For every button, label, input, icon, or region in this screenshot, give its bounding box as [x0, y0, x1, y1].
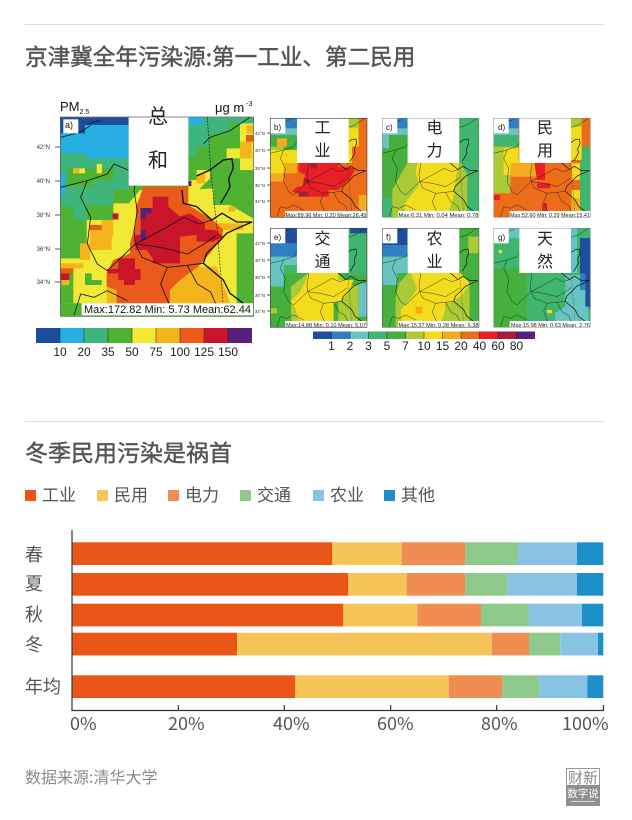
- small map tags and stats: g): [498, 233, 505, 242]
- colour bar: sectors: 80: [510, 339, 523, 353]
- colour bar: sectors: [313, 332, 535, 353]
- map heading: PM2.5: PM: [60, 99, 80, 114]
- axis labels: [70, 710, 609, 736]
- panel: power map: [382, 118, 479, 217]
- small map labels: 用: [537, 137, 553, 161]
- map panel tag: a): [65, 120, 73, 130]
- small map tags and stats: Max:15.98 Min: 0.63 Mean: 2.76: [511, 323, 590, 329]
- small map labels: 力: [426, 137, 443, 161]
- small map tags and stats: Max:6.31 Min: 0.04 Mean: 0.78: [398, 213, 478, 219]
- colour bar: sectors: 5: [384, 339, 391, 353]
- small map latitude labels: 40°N: [255, 258, 265, 263]
- latitude labels: 34°N: [37, 280, 50, 286]
- legend: 其他: [401, 481, 435, 506]
- season labels: 秋: [25, 601, 43, 627]
- title: 京津冀全年污染源:第一工业、第二民用: [25, 39, 415, 72]
- small map tags and stats: e): [274, 233, 281, 242]
- small map tags and stats: Max:15.37 Min: 0.28 Mean: 6.38: [398, 323, 478, 329]
- section heading: 冬季民用污染是祸首: [25, 434, 232, 468]
- small map latitude labels: 38°N: [255, 166, 265, 171]
- legend: 电力: [185, 481, 219, 506]
- panel: industry map: [270, 118, 367, 217]
- colour bar: sectors: 15: [436, 339, 449, 353]
- colour bar: total: 125: [194, 345, 214, 359]
- small map tags and stats: d): [498, 123, 505, 132]
- small map latitude labels: 38°N: [255, 275, 265, 280]
- colour bar: sectors: 1: [328, 339, 335, 353]
- colour bar: total: 20: [77, 345, 91, 359]
- small map tags and stats: b): [274, 123, 281, 132]
- colour bar: total: 75: [149, 345, 163, 359]
- legend: 交通: [257, 481, 291, 506]
- legend: 民用: [114, 481, 148, 506]
- map unit: -3: [244, 101, 252, 108]
- small map latitude labels: 42°N: [255, 131, 265, 136]
- colour bar: sectors: 10: [417, 339, 431, 353]
- map: total: [60, 110, 254, 316]
- small map labels: 通: [314, 248, 331, 272]
- colour bar: sectors: 20: [454, 339, 468, 353]
- label: total: 总: [148, 100, 168, 129]
- colour bar: sectors: 2: [347, 339, 354, 353]
- legend: 农业: [330, 481, 364, 506]
- bar: annual: [72, 675, 603, 698]
- season labels: 夏: [25, 570, 43, 596]
- small map tags and stats: f): [386, 233, 391, 242]
- season labels: [25, 541, 61, 699]
- latitude labels: 42°N: [37, 145, 50, 151]
- colour bar: sectors: 60: [491, 339, 505, 353]
- label: total: 和: [148, 144, 168, 173]
- small map labels: 工: [314, 114, 331, 138]
- small map labels: 然: [537, 248, 553, 272]
- colour bar: total: 35: [101, 345, 115, 359]
- bar: spring: [72, 542, 603, 565]
- season labels: 年均: [25, 673, 61, 699]
- axis labels: 40%: [273, 710, 310, 736]
- chart axes: [72, 530, 604, 710]
- bar: autumn: [72, 604, 603, 626]
- axis labels: 80%: [481, 710, 518, 736]
- small map tags and stats: [274, 123, 590, 329]
- middle divider: [25, 421, 604, 422]
- small map labels: 交: [314, 225, 331, 249]
- latitude labels: 38°N: [37, 213, 50, 219]
- stacked bar chart: [25, 530, 609, 736]
- logo: 财新: [568, 767, 598, 788]
- panel: transport map: [270, 228, 367, 327]
- axis labels: 60%: [377, 710, 414, 736]
- top divider: [25, 24, 604, 25]
- map unit: μg m: [215, 100, 244, 115]
- bar: winter: [72, 633, 603, 655]
- colour bar: total: [36, 328, 252, 359]
- small map latitude labels: 34°N: [255, 199, 265, 204]
- colour bar: total: 100: [170, 345, 190, 359]
- latitude labels: 40°N: [37, 179, 50, 185]
- season labels: 冬: [25, 631, 43, 657]
- colour bar: sectors: 7: [402, 339, 409, 353]
- small map latitude labels: 34°N: [255, 309, 265, 314]
- map heading: PM2.5: 2.5: [80, 109, 89, 116]
- small map latitude labels: 42°N: [255, 241, 265, 246]
- panel: total PM2.5 map: [36, 99, 254, 359]
- small map labels: 电: [426, 114, 443, 138]
- axis labels: 20%: [168, 710, 205, 736]
- small map tags and stats: Max:52.60 Min: 0.29 Mean:15.41: [510, 213, 590, 219]
- season labels: 春: [25, 541, 43, 567]
- logo: 数字说: [567, 786, 599, 801]
- colour bar: sectors: 40: [473, 339, 486, 353]
- small map latitude labels: 36°N: [255, 293, 265, 298]
- small map latitude labels: 36°N: [255, 183, 265, 188]
- small map latitude labels: 40°N: [255, 148, 265, 153]
- panel: agriculture map: [382, 228, 479, 327]
- small map labels: [314, 114, 553, 272]
- panel: natural map: [494, 228, 590, 327]
- small map tags and stats: Max:14.88 Min: 0.10 Mean: 5.07: [286, 323, 366, 329]
- colour bar: total: 50: [125, 345, 139, 359]
- axis labels: 100%: [562, 710, 609, 736]
- label: total: [148, 100, 168, 173]
- source note: 数据来源:清华大学: [25, 764, 157, 788]
- bar: summer: [72, 573, 603, 596]
- panel: residential map: [494, 118, 590, 217]
- colour bar: total: 150: [218, 345, 238, 359]
- colour bar: total: 10: [53, 345, 67, 359]
- small map tags and stats: c): [386, 123, 393, 132]
- colour bar: sectors: 3: [365, 339, 372, 353]
- small map labels: 业: [426, 248, 443, 272]
- small map labels: 农: [426, 225, 443, 249]
- map stats: Max:172.82 Min: 5.73 Mean:62.44: [84, 304, 251, 316]
- small map labels: 业: [314, 137, 331, 161]
- latitude labels: 36°N: [37, 247, 50, 253]
- small map tags and stats: Max:89.96 Min: 0.20 Mean:26.45: [286, 213, 366, 219]
- small map latitude labels: [255, 131, 270, 314]
- axis labels: 0%: [70, 710, 97, 736]
- small map labels: 天: [537, 225, 553, 249]
- latitude labels: [37, 145, 60, 286]
- legend: [25, 481, 435, 506]
- logo: [566, 767, 600, 806]
- legend: 工业: [42, 481, 76, 506]
- small map labels: 民: [537, 114, 553, 138]
